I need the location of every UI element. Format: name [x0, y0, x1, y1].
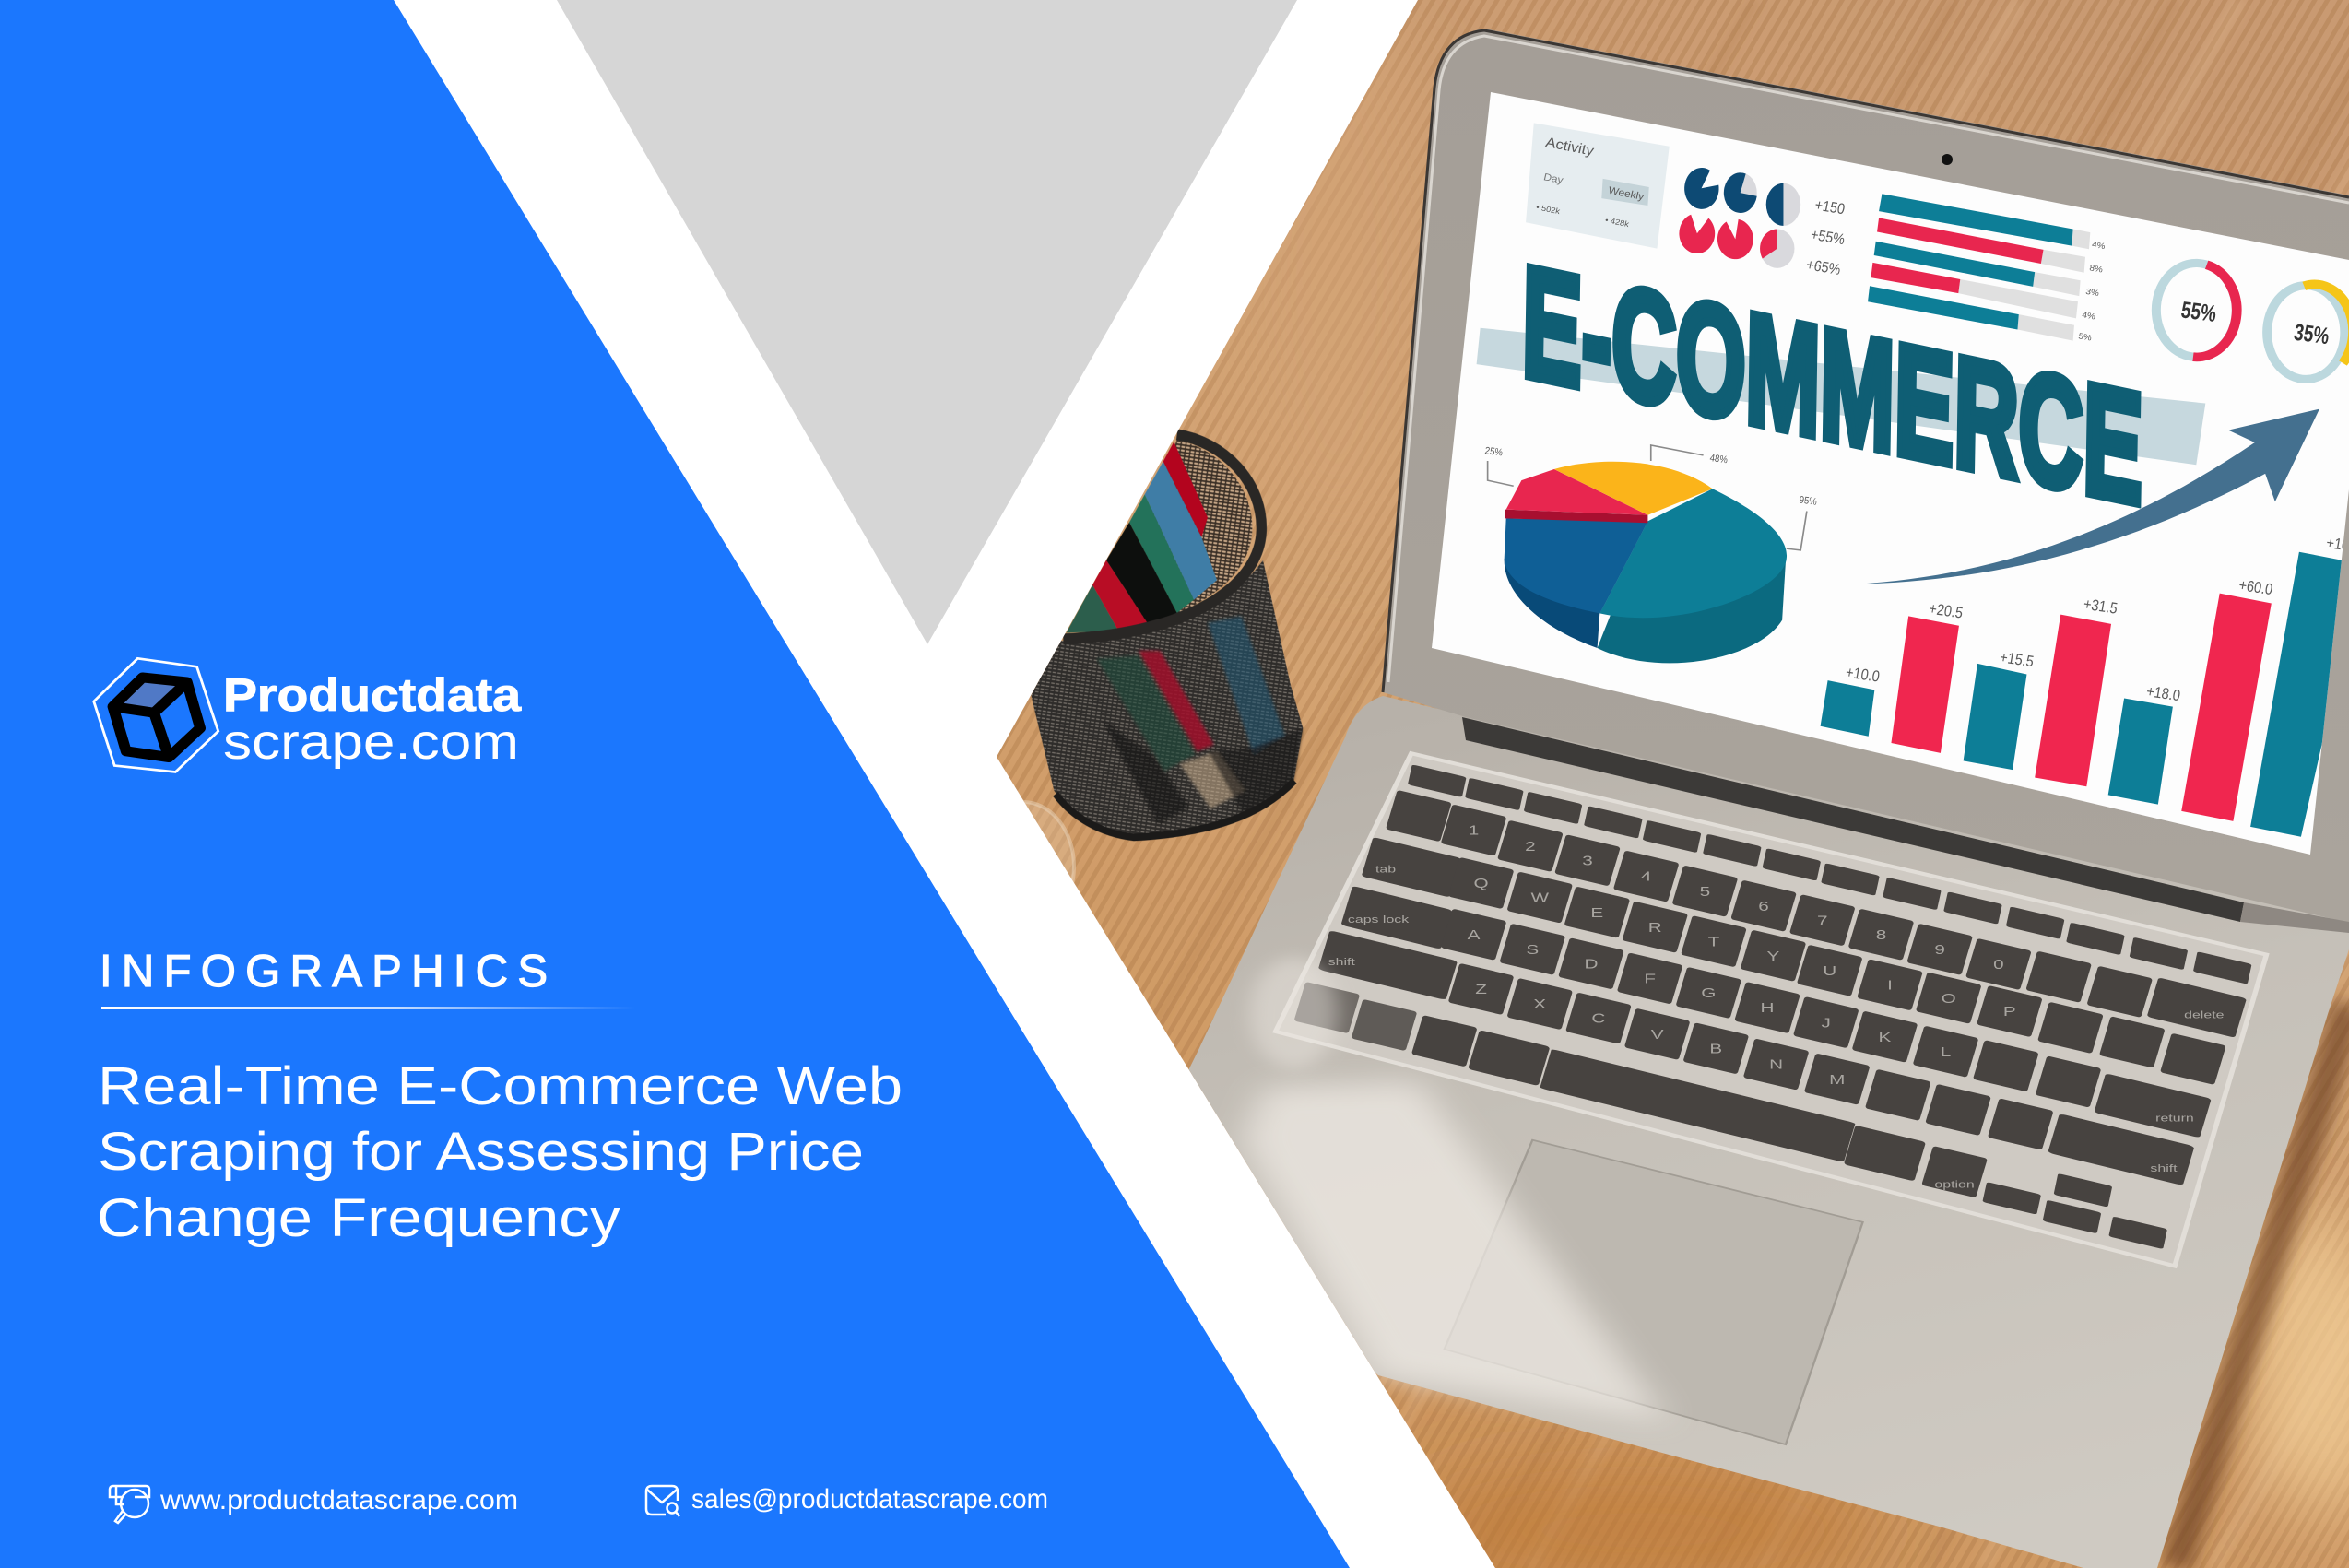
logo — [94, 658, 522, 772]
key legends: S — [1526, 942, 1539, 957]
key legends: P — [2003, 1004, 2016, 1020]
donut chart 55% — [2156, 263, 2237, 357]
key legends: 6 — [1758, 899, 1769, 914]
donut chart 55%: 55% — [2179, 297, 2218, 327]
reflection on left of keyboard — [1250, 957, 1338, 1068]
lid rim — [1383, 30, 2349, 692]
icon: hexagon cube — [94, 658, 218, 772]
bar chart values: +20.5 — [1928, 601, 1965, 622]
key legends: Q — [1473, 876, 1489, 890]
mesh body — [1031, 560, 1303, 837]
laptop screen — [1432, 92, 2349, 855]
shift key row — [1318, 930, 2194, 1185]
key legends: tab — [1375, 863, 1396, 875]
key legends: caps lock — [1348, 913, 1409, 925]
key legends: C — [1591, 1010, 1605, 1026]
icon: webcam — [1942, 154, 1953, 165]
section label: INFOGRAPHICS — [100, 947, 548, 996]
key legends: G — [1701, 985, 1716, 1000]
lid lower edge — [2240, 902, 2349, 933]
activity panel: • 428k — [1604, 216, 1630, 229]
small pie values: +55% — [1809, 227, 1847, 248]
logo wordmark bottom: scrape.com — [223, 714, 519, 770]
pencil holder — [1031, 434, 1303, 837]
e-commerce headline: E-COMMERCE — [1521, 234, 2144, 538]
footer email — [646, 1484, 1048, 1516]
bar chart values: +15.5 — [1999, 649, 2035, 671]
key legends: T — [1708, 934, 1719, 949]
footer website — [110, 1485, 518, 1523]
key legends — [1328, 822, 2225, 1190]
key legends: M — [1829, 1072, 1845, 1087]
blue panel — [0, 0, 1350, 1568]
horizontal bar values: 5% — [2077, 332, 2093, 343]
key legends: 3 — [1582, 853, 1593, 868]
key legends: Z — [1475, 982, 1487, 996]
main heading: Scraping for Assessing Price — [98, 1122, 864, 1182]
pie chart labels: 25% — [1484, 446, 1504, 459]
icon: web search — [110, 1486, 149, 1523]
horizontal bars — [1868, 194, 2090, 341]
logo wordmark top: Productdata — [223, 669, 522, 721]
number key row — [1386, 790, 2247, 1038]
laptop lid — [1383, 29, 2349, 923]
activity panel: Day — [1542, 172, 1564, 186]
sun highlight on palm rest and trackpad — [1243, 1081, 1669, 1421]
pie chart callouts — [1488, 445, 1807, 550]
donut chart 35% — [2267, 284, 2349, 379]
key legends: K — [1879, 1030, 1891, 1044]
key legends: return — [2155, 1112, 2194, 1124]
donut chart 35%: 35% — [2292, 319, 2331, 349]
keyboard well — [1276, 753, 2266, 1266]
bar chart — [1821, 552, 2349, 837]
icon: glass object on desk — [1023, 800, 1076, 883]
function key row — [1408, 764, 2252, 984]
key legends: R — [1648, 920, 1662, 935]
bar chart values: +60.0 — [2237, 577, 2274, 598]
screen content — [1477, 123, 2349, 837]
key legends: 4 — [1641, 868, 1651, 884]
holder interior — [1128, 441, 1252, 622]
bottom key row — [1294, 982, 2167, 1249]
key legends: option — [1934, 1178, 1975, 1190]
bar chart values: +10.0 — [1845, 665, 1881, 686]
key legends: 1 — [1469, 822, 1479, 838]
key legends: H — [1761, 1000, 1775, 1016]
key legends: D — [1584, 956, 1598, 972]
key legends: 7 — [1817, 913, 1828, 928]
key legends: delete — [2184, 1008, 2225, 1020]
keyboard — [1243, 753, 2266, 1444]
trackpad — [1445, 1140, 1863, 1444]
divider rule — [101, 1007, 636, 1009]
small pie values: +65% — [1805, 257, 1842, 278]
bar chart values: +31.5 — [2083, 596, 2119, 618]
main heading: Real-Time E-Commerce Web — [98, 1056, 903, 1116]
wooden desk — [997, 0, 2349, 1568]
grey triangle — [557, 0, 1297, 644]
lid inner rim highlight — [1388, 36, 2349, 682]
hinge strip — [1462, 717, 2244, 922]
key legends: 0 — [1993, 957, 2004, 972]
key legends: I — [1887, 977, 1893, 993]
key legends: E — [1590, 905, 1603, 920]
activity panel: Activity — [1544, 136, 1595, 159]
horizontal bar values: 3% — [2084, 287, 2100, 299]
key legends: Y — [1767, 949, 1779, 963]
laptop base — [1143, 696, 2349, 1568]
photo: laptop on a wooden desk — [997, 0, 2349, 1568]
key legends: J — [1822, 1015, 1831, 1031]
icon: mail search — [646, 1486, 679, 1516]
horizontal bar values: 4% — [2081, 311, 2096, 322]
key legends: 8 — [1876, 927, 1886, 942]
activity panel: Weekly — [1607, 185, 1646, 203]
small pie charts — [1679, 168, 1800, 268]
main heading — [97, 1056, 903, 1248]
activity panel — [1526, 123, 1670, 249]
growth arrow — [1854, 409, 2319, 584]
email address: sales@productdatascrape.com — [691, 1484, 1048, 1515]
pencils — [1067, 442, 1217, 632]
website address: www.productdatascrape.com — [159, 1485, 518, 1515]
key legends: X — [1533, 996, 1546, 1012]
pie chart labels: 48% — [1709, 454, 1729, 466]
main heading: Change Frequency — [97, 1188, 620, 1248]
holder rim — [1063, 434, 1261, 639]
key legends: V — [1651, 1027, 1664, 1042]
QWERTY key row — [1362, 837, 2226, 1085]
key legends: W — [1530, 890, 1549, 905]
key legends: A — [1468, 927, 1480, 942]
pie chart labels — [1484, 446, 1818, 508]
bar chart values: +18.0 — [2145, 683, 2182, 705]
3D pie chart — [1505, 462, 1787, 663]
key legends: shift — [2150, 1161, 2178, 1174]
small pie values: +150 — [1813, 197, 1847, 218]
e-commerce banner band — [1477, 328, 2205, 465]
activity panel: • 502k — [1535, 203, 1562, 216]
horizontal bar values: 8% — [2088, 264, 2104, 275]
key legends: F — [1644, 971, 1656, 986]
key legends: O — [1942, 991, 1956, 1006]
key legends: U — [1823, 963, 1836, 978]
key legends: B — [1709, 1041, 1722, 1056]
pie chart labels: 95% — [1799, 495, 1818, 508]
bar chart values — [1845, 535, 2349, 705]
key legends: 9 — [1934, 942, 1945, 957]
key legends: 2 — [1525, 839, 1536, 854]
small pie values — [1805, 197, 1847, 278]
holder base — [1056, 781, 1294, 837]
key legends: shift — [1328, 955, 1355, 968]
key legends: N — [1769, 1056, 1783, 1072]
horizontal bar values — [2077, 240, 2107, 343]
home key row — [1340, 886, 2212, 1138]
pencil shadows through the mesh — [1097, 616, 1303, 823]
horizontal bar values: 4% — [2091, 240, 2107, 252]
key legends: L — [1941, 1044, 1951, 1059]
key legends: 5 — [1700, 884, 1710, 899]
